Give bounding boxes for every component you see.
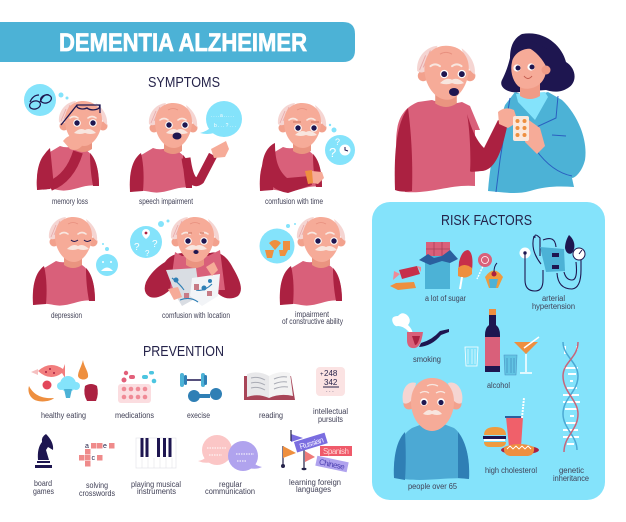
risk: smoking <box>392 313 449 364</box>
prevention: solving crosswords: c <box>92 455 96 462</box>
symptom: depression <box>33 217 118 320</box>
prevention: medications <box>115 371 156 420</box>
prevention: intellectual pursuits: · · · <box>326 389 334 395</box>
label: learning foreign <box>289 478 341 487</box>
symptom: confusion with location: ? <box>152 239 158 250</box>
prevention: intellectual pursuits <box>313 367 348 424</box>
prevention: solving crosswords <box>79 443 115 498</box>
label: medications <box>115 411 154 420</box>
label <box>553 466 590 483</box>
label: intellectual <box>313 407 348 416</box>
label: alcohol <box>487 381 510 390</box>
symptom: speech impairment: ....a..... <box>211 113 234 119</box>
prevention: reading <box>244 372 295 420</box>
risk: arterial hypertension <box>520 235 585 311</box>
map <box>166 268 220 306</box>
risk: high cholesterol <box>483 398 539 475</box>
symptom: speech impairment <box>130 101 242 206</box>
title banner: DEMENTIA ALZHEIMER <box>59 29 307 57</box>
label: speech impairment <box>139 197 194 206</box>
label: impairment <box>295 310 330 319</box>
label: reading <box>259 411 283 420</box>
label: smoking <box>413 355 441 364</box>
label: a lot of sugar <box>425 294 466 303</box>
prevention: learning foreign languages: Russian <box>298 435 325 451</box>
label <box>205 480 255 496</box>
symptom: speech impairment: b...?... <box>214 123 236 129</box>
risk: genetic inheritance <box>553 342 590 483</box>
illustration: nurse and patient <box>395 33 586 193</box>
heading: symptoms: SYMPTOMS <box>148 74 220 91</box>
label: genetic <box>559 466 584 475</box>
label: communication <box>205 487 255 496</box>
panel: risk factors <box>372 202 605 500</box>
symptom: confusion with time: ? <box>329 145 336 160</box>
label: comfusion with location <box>162 311 230 320</box>
symptom: confusion with time <box>260 103 355 206</box>
label <box>313 407 348 424</box>
label: instruments <box>137 487 176 496</box>
label: healthy eating <box>41 411 86 420</box>
title banner <box>0 22 355 62</box>
label: regular <box>219 480 242 489</box>
nurse <box>488 33 586 193</box>
label <box>289 478 341 494</box>
label: depression <box>51 311 82 320</box>
label: inheritance <box>553 474 590 483</box>
prevention: exercise <box>180 373 222 420</box>
prevention: solving crosswords: a <box>85 443 89 450</box>
label: games <box>33 487 54 496</box>
risk: sugar <box>390 242 503 303</box>
label: memory loss <box>52 197 88 206</box>
label: comfusion with time <box>265 197 323 206</box>
label: languages <box>296 485 331 494</box>
label: arterial <box>542 294 565 303</box>
label: solving <box>86 481 108 490</box>
symptom: confusion with time: ? <box>335 137 340 147</box>
prevention: solving crosswords: e <box>103 443 107 450</box>
label <box>131 480 181 496</box>
prevention: intellectual pursuits: 342 <box>324 378 338 387</box>
label: of constructive ability <box>282 317 343 326</box>
symptom: confusion with location: ? <box>134 242 140 253</box>
symptom: confusion with location: ? <box>145 249 150 258</box>
prevention: intellectual pursuits: 248 <box>324 369 338 378</box>
label: crosswords <box>79 489 115 498</box>
prevention: board games <box>33 434 54 496</box>
risk: alcohol <box>465 309 539 390</box>
label <box>532 294 575 311</box>
symptom: impairment of constructive ability <box>260 217 346 326</box>
label: pursuits <box>318 415 343 424</box>
label: playing musical <box>131 480 181 489</box>
heading: prevention: PREVENTION <box>143 343 224 360</box>
prevention: playing musical instruments <box>131 438 181 496</box>
prevention: learning foreign languages: Chinese <box>318 457 346 472</box>
prevention: intellectual pursuits: + <box>320 372 324 378</box>
label <box>79 481 115 498</box>
label: execise <box>187 411 210 420</box>
prevention: healthy eating <box>28 360 98 420</box>
symptom: memory loss <box>24 84 108 206</box>
patient <box>395 46 518 192</box>
label: high cholesterol <box>485 466 537 475</box>
risk: people over 65 <box>394 378 469 491</box>
prevention: regular communication <box>198 435 262 496</box>
heading: risk factors: RISK FACTORS <box>441 212 532 229</box>
label <box>33 479 54 496</box>
prevention: learning foreign languages <box>281 430 352 494</box>
prevention: learning foreign languages: Spanish <box>323 447 349 456</box>
label <box>282 310 343 326</box>
symptom: confusion with location <box>130 217 241 320</box>
label: people over 65 <box>408 482 458 491</box>
label: board <box>34 479 52 488</box>
label: hypertension <box>532 302 575 311</box>
pill pack <box>513 116 529 141</box>
